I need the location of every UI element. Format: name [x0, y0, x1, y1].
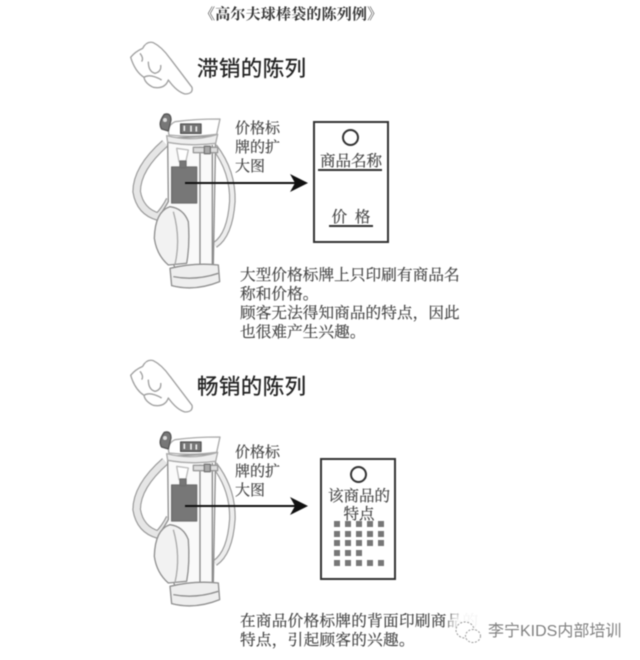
- price underline: [329, 225, 373, 227]
- icon: golf bag: [132, 112, 236, 290]
- label: enlarged price tag: 牌的扩: [235, 140, 280, 156]
- text block: best-selling explanation: 特点，引起顾客的兴趣。: [240, 632, 415, 649]
- label: enlarged price tag: 牌的扩: [235, 464, 280, 480]
- text block: best-selling explanation: [240, 612, 478, 649]
- text block: slow-selling explanation: 也很难产生兴趣。: [240, 324, 366, 341]
- arrow: [184, 496, 308, 516]
- icon: pointing hand: [130, 359, 194, 414]
- feature heading: [328, 487, 390, 523]
- panel: slow-selling display: [130, 41, 460, 341]
- product name: 商品名称: [320, 153, 382, 170]
- text block: slow-selling explanation: [240, 266, 460, 341]
- price tag: name and price only: [313, 121, 389, 243]
- heading: best-selling display: 畅销的陈列: [197, 375, 307, 399]
- title: 《高尔夫球棒袋的陈列例》: [200, 7, 382, 23]
- label: enlarged price tag: [234, 444, 280, 499]
- label: enlarged price tag: 价格标: [235, 121, 280, 137]
- product name underline: [318, 169, 382, 171]
- label: enlarged price tag: [234, 120, 280, 175]
- icon: pointing hand: [130, 41, 194, 96]
- price: 价 格: [332, 209, 370, 226]
- watermark halo: [445, 600, 505, 640]
- heading: slow-selling display: 滞销的陈列: [197, 57, 307, 81]
- panel: best-selling display: [130, 359, 478, 649]
- price tag: product features: [320, 458, 396, 580]
- text block: slow-selling explanation: 顾客无法得知商品的特点，因此: [240, 305, 460, 322]
- icon: golf bag: [132, 430, 236, 608]
- watermark text: 李宁KIDS内部培训: [488, 623, 621, 640]
- label: enlarged price tag: 大图: [235, 483, 265, 499]
- feature heading: 特点: [343, 506, 374, 523]
- feature heading: 该商品的: [328, 488, 390, 505]
- tag hole: [350, 466, 367, 483]
- feature text squares: [333, 520, 385, 567]
- text block: slow-selling explanation: 称和价格。: [240, 286, 318, 303]
- arrow: [184, 174, 308, 192]
- tag hole: [342, 129, 359, 146]
- text block: best-selling explanation: 在商品价格标牌的背面印刷商品的: [240, 613, 478, 630]
- text block: slow-selling explanation: 大型价格标牌上只印刷有商品名: [240, 267, 460, 284]
- label: enlarged price tag: 大图: [235, 159, 265, 175]
- label: enlarged price tag: 价格标: [235, 445, 280, 461]
